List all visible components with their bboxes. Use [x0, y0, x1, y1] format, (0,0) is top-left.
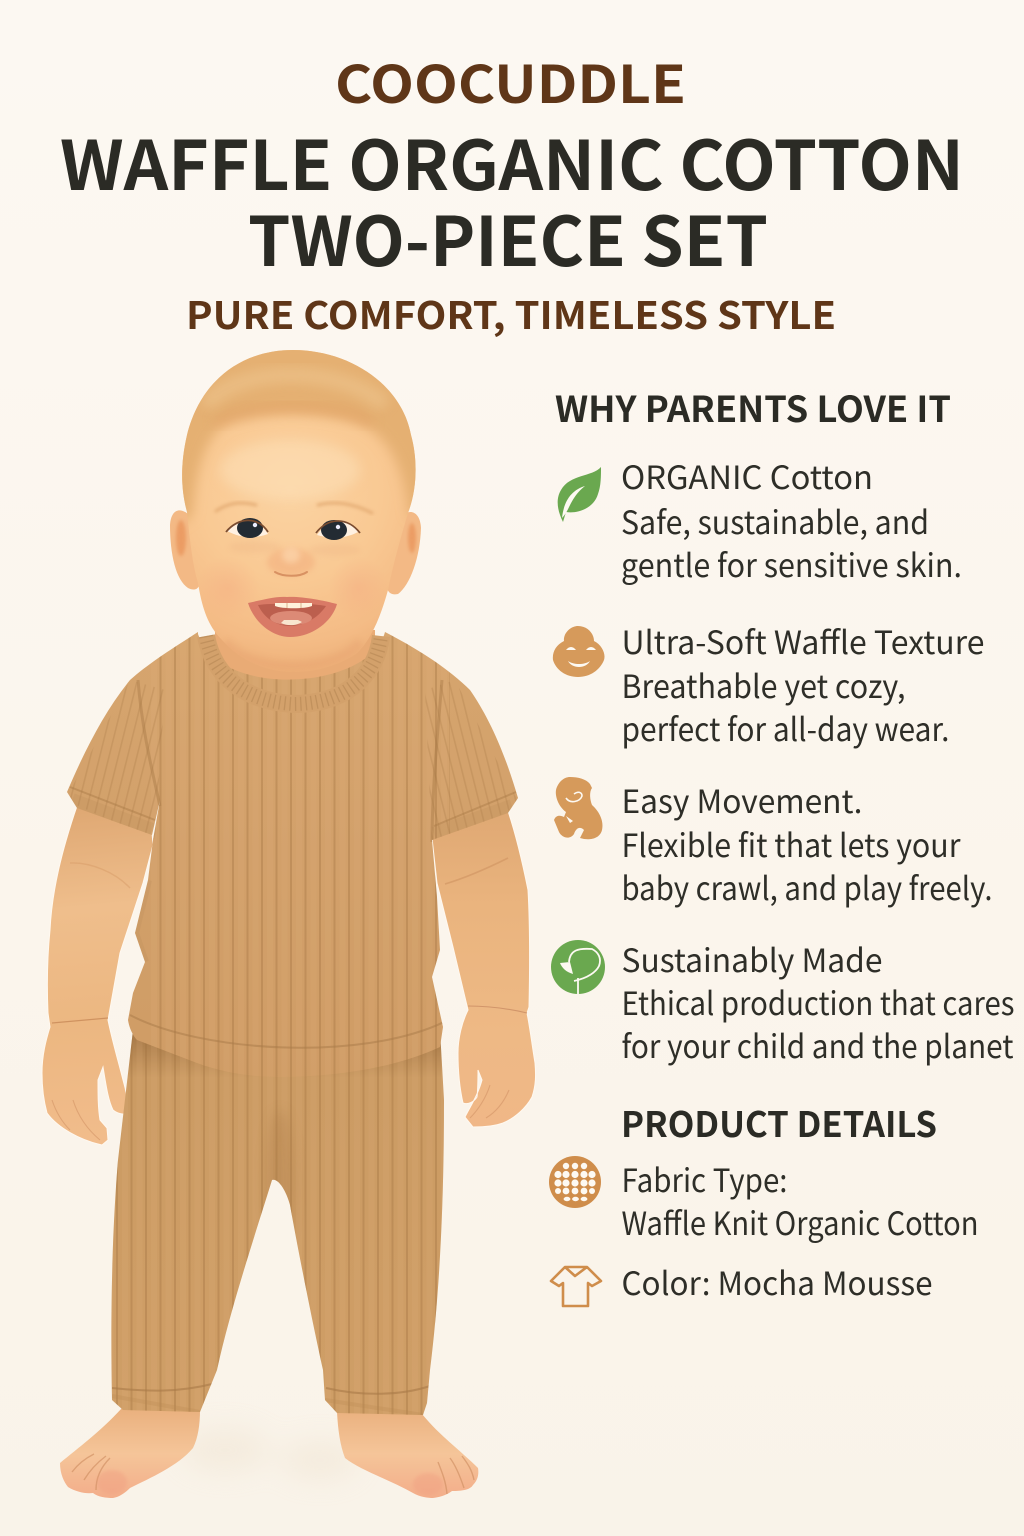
right arm and hand [432, 811, 536, 1127]
brand name: COOCUDDLE [335, 43, 686, 118]
detail: fabric type: Waffle Knit Organic Cotton [622, 1199, 978, 1245]
eyebrows [216, 503, 372, 513]
product title [60, 111, 964, 286]
benefit: easy movement: baby crawl, and play freely. [622, 864, 992, 910]
detail: fabric type: Fabric Type: [622, 1156, 788, 1202]
ears [170, 510, 421, 594]
benefit: easy movement: Flexible fit that lets your [622, 821, 961, 867]
pants [111, 1034, 444, 1415]
benefit: organic cotton: Safe, sustainable, and [621, 498, 929, 544]
left foot [60, 1408, 200, 1498]
icon: t-shirt outline [551, 1267, 601, 1306]
benefit: easy movement: Easy Movement. [622, 777, 862, 823]
section heading: WHY PARENTS LOVE IT [555, 381, 951, 433]
benefit: easy movement [554, 777, 992, 910]
icon: leaf [558, 467, 601, 522]
benefit: waffle texture: Breathable yet cozy, [622, 662, 906, 708]
neck [215, 630, 375, 705]
header block [60, 43, 964, 340]
icon: crawling baby [554, 777, 603, 839]
icon: baby face [553, 626, 605, 677]
benefit: waffle texture [553, 618, 984, 751]
floor shadow [180, 1428, 360, 1480]
benefit: sustainably made: Sustainably Made [622, 936, 882, 982]
benefit: waffle texture: perfect for all-day wear. [622, 705, 950, 751]
nose [267, 547, 315, 576]
eyes [226, 518, 360, 540]
icon: green globe leaf [551, 940, 605, 994]
shirt collar [206, 636, 381, 704]
section heading: PRODUCT DETAILS [621, 1097, 937, 1148]
benefit: organic cotton [558, 453, 962, 587]
mouth [248, 597, 337, 637]
why parents love it section [551, 381, 1014, 1068]
benefit: sustainably made [551, 936, 1014, 1068]
left arm and hand [42, 806, 153, 1145]
right foot [337, 1412, 478, 1498]
product title: TWO-PIECE SET [248, 187, 768, 286]
hair and face shading [182, 350, 416, 652]
product title: WAFFLE ORGANIC COTTON [60, 111, 964, 210]
shirt [60, 625, 530, 1085]
benefit: organic cotton: ORGANIC Cotton [621, 453, 873, 499]
head [182, 350, 416, 672]
icon: waffle fabric [549, 1156, 601, 1208]
tagline: PURE COMFORT, TIMELESS STYLE [186, 285, 836, 340]
detail: fabric type [549, 1156, 978, 1245]
detail: colour: Color: Mocha Mousse [622, 1259, 932, 1305]
product details section [549, 1097, 978, 1306]
baby photo illustration [42, 340, 536, 1498]
benefit: organic cotton: gentle for sensitive skin. [621, 541, 962, 587]
benefit: waffle texture: Ultra-Soft Waffle Texture [622, 618, 984, 664]
